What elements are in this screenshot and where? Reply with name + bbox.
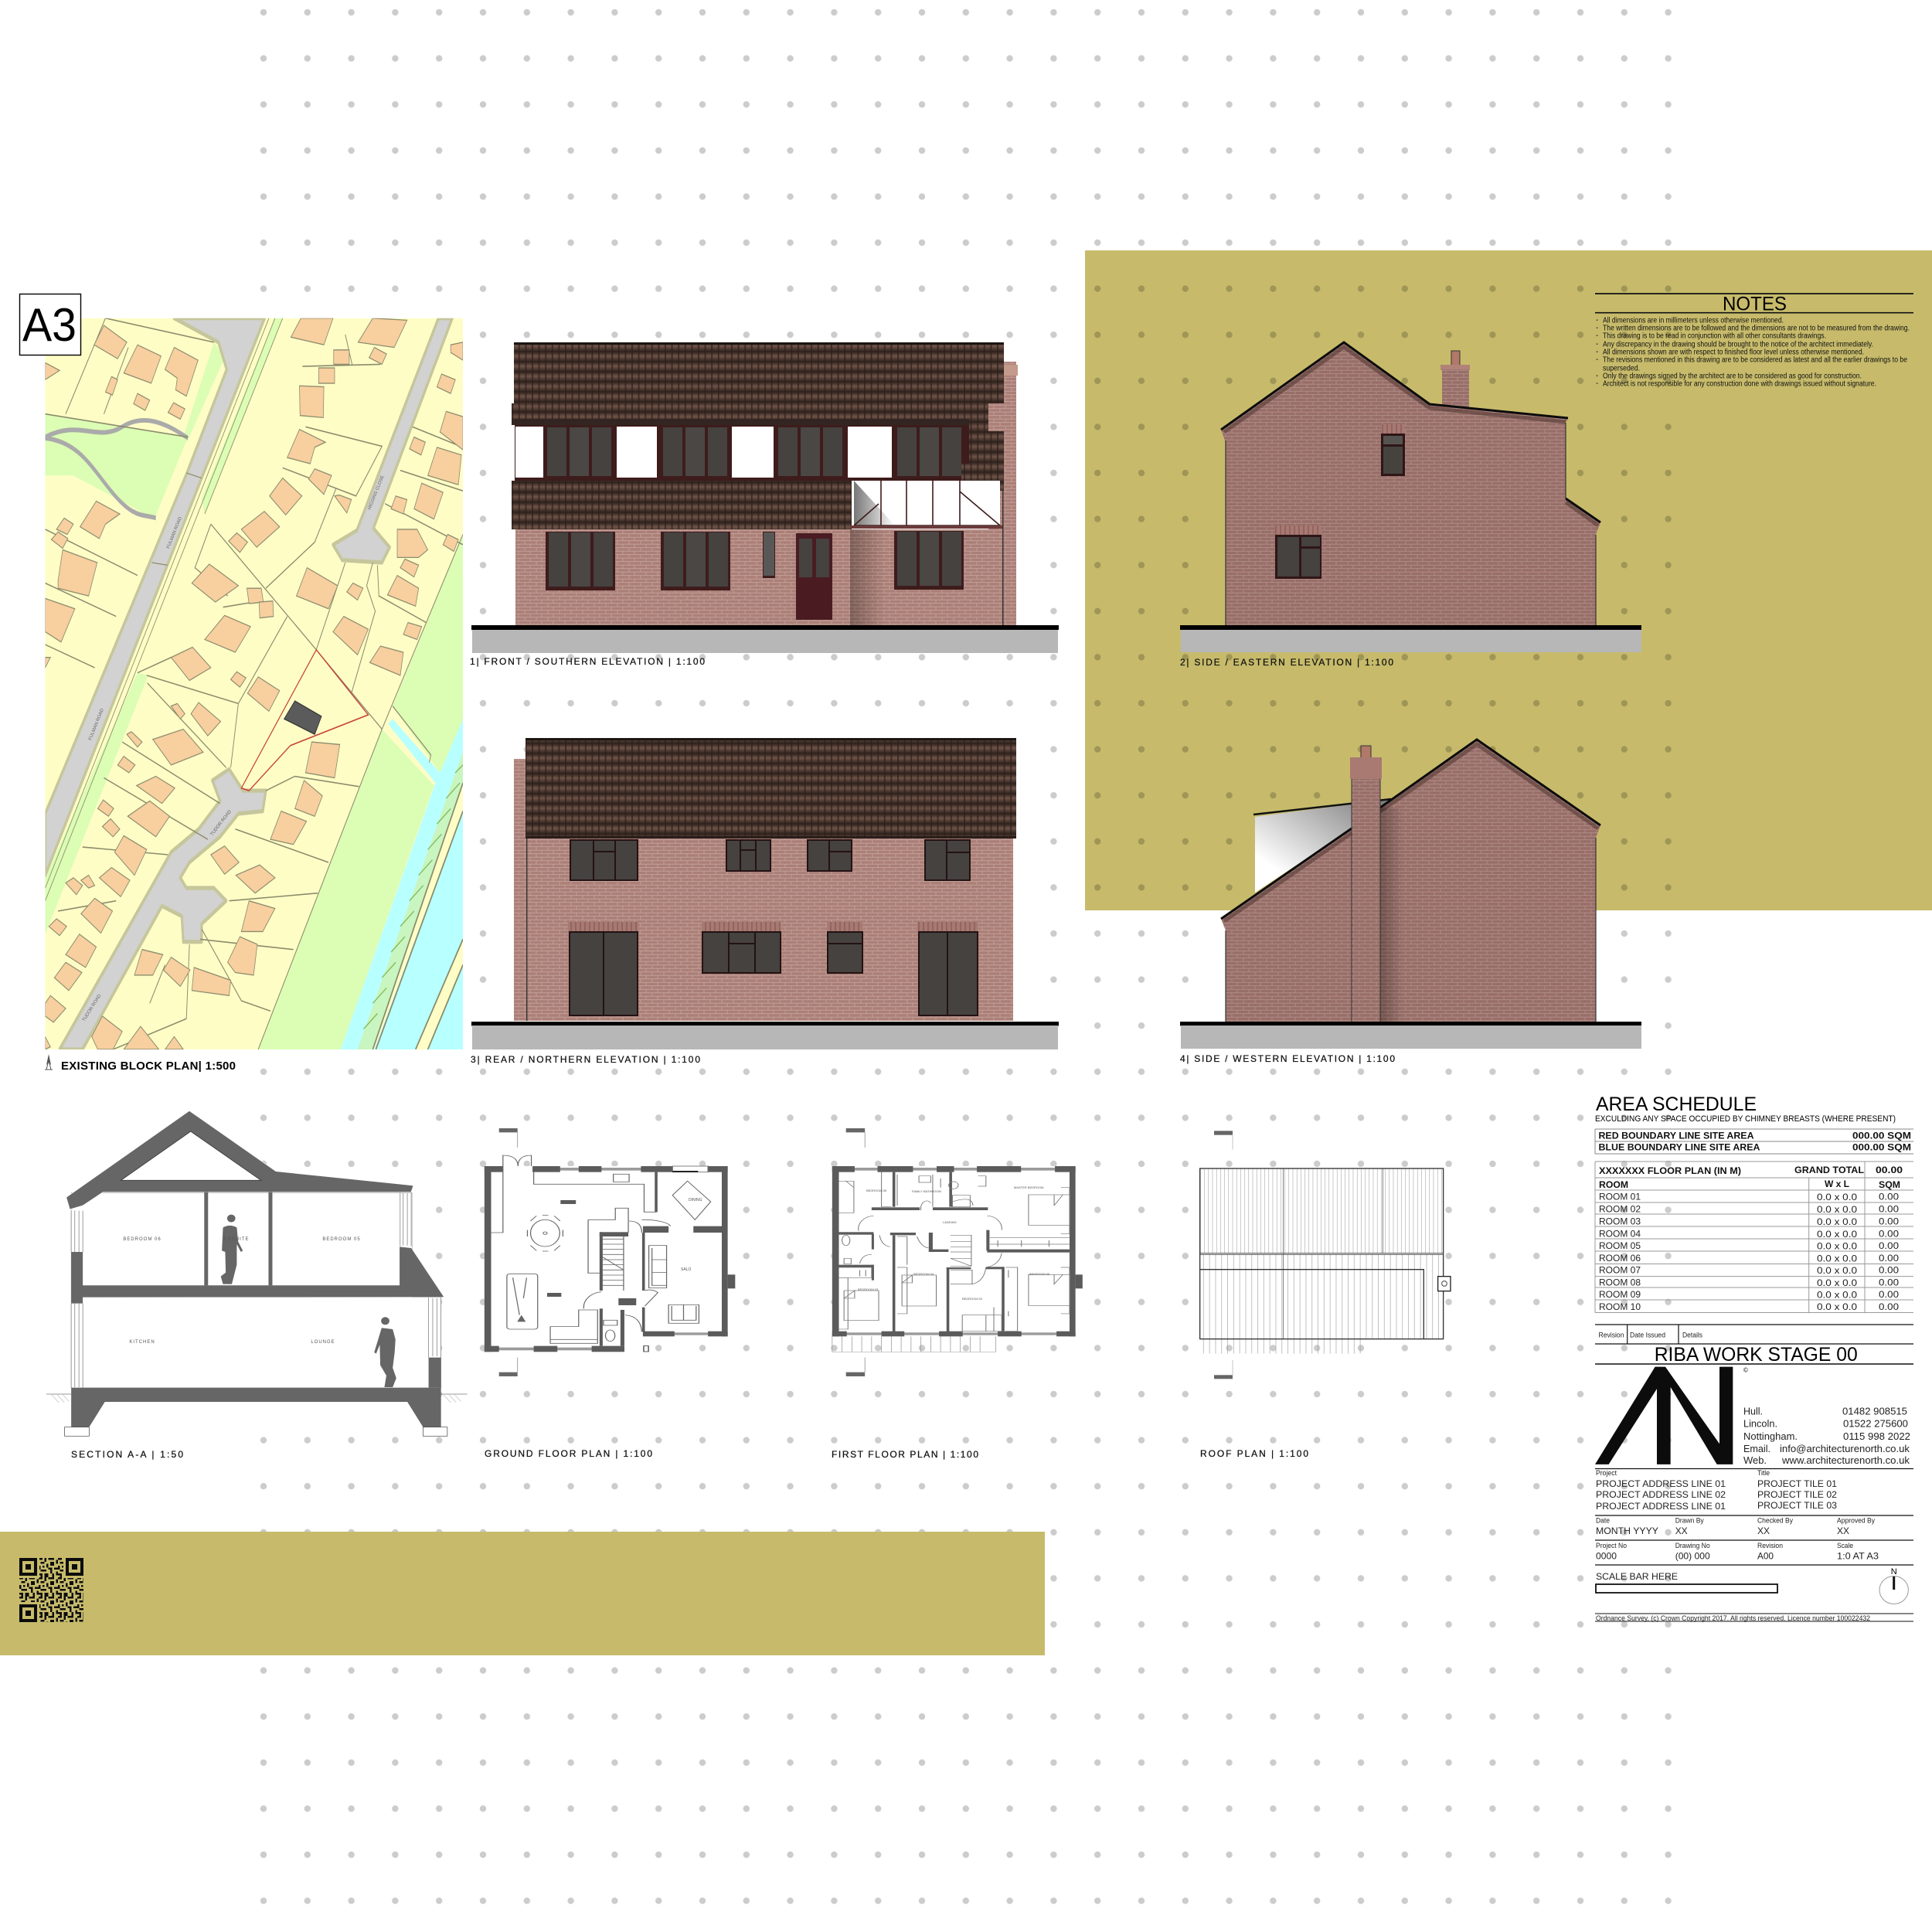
caption: ROOF PLAN | 1:100 [1200, 1448, 1308, 1459]
project fields: 0000 [1596, 1550, 1617, 1561]
first floor plan [832, 1128, 1083, 1460]
heading: AREA SCHEDULE [1596, 1094, 1757, 1115]
room schedule table: 0.00 [1879, 1277, 1899, 1287]
project fields: Scale [1837, 1542, 1853, 1549]
project fields: Drawing No [1675, 1542, 1710, 1549]
room schedule table: SQM [1879, 1179, 1900, 1190]
first floor room labels: BEDROOM 02 [962, 1297, 983, 1301]
windows [1275, 424, 1405, 579]
notes list: - [1596, 348, 1598, 356]
roads [46, 318, 452, 1049]
room schedule table: 0.0 x 0.0 [1817, 1265, 1857, 1276]
water channels [341, 719, 463, 1049]
dot grid background [242, 0, 1690, 1923]
section room labels: BEDROOM 05 [322, 1237, 361, 1242]
scale bar: SCALE BAR HERE [1596, 1571, 1678, 1582]
roof plan [1200, 1131, 1451, 1459]
section marks [1214, 1131, 1233, 1379]
caption: SECTION A-A | 1:50 [71, 1449, 183, 1460]
room schedule table: ROOM 02 [1599, 1204, 1641, 1215]
notes list: Any discrepancy in the drawing should be brought to the notice of the architect immediately. [1603, 340, 1873, 349]
contact details [1743, 1406, 1910, 1466]
main gable [1380, 740, 1600, 1022]
room schedule table: ROOM 06 [1599, 1253, 1641, 1264]
notes list: - [1596, 372, 1598, 380]
north arrow small [45, 1054, 53, 1070]
notes list: All dimensions are in millimeters unless otherwise mentioned. [1603, 316, 1784, 325]
logo [1595, 1367, 1733, 1464]
site house footprint [284, 701, 321, 734]
north point: N [1891, 1567, 1897, 1577]
first floor room labels: BEDROOM 03 [858, 1287, 879, 1291]
wall left [1221, 828, 1352, 1022]
window bars [832, 1168, 1076, 1335]
caption: 4| SIDE / WESTERN ELEVATION | 1:100 [1180, 1053, 1395, 1064]
wall [515, 529, 1002, 625]
section marks [499, 1128, 518, 1376]
revision row [1595, 1325, 1913, 1344]
road names on map: TUDOR ROAD [209, 809, 233, 837]
room schedule table: 0.0 x 0.0 [1817, 1301, 1857, 1312]
project fields: Drawn By [1675, 1517, 1704, 1525]
project fields: (00) 000 [1675, 1550, 1710, 1561]
room schedule table: XXXXXXX FLOOR PLAN (IN M) [1599, 1165, 1741, 1176]
project fields: XX [1757, 1526, 1770, 1536]
ground line [471, 1022, 1059, 1049]
project fields: PROJECT TILE 01 [1757, 1478, 1837, 1489]
project fields: PROJECT TILE 02 [1757, 1489, 1837, 1500]
notes list: All dimensions shown are with respect to finished floor level unless otherwise mentioned. [1603, 348, 1864, 356]
lower roof [512, 481, 852, 529]
first floor room labels: FAMILY BATHROOM [912, 1189, 941, 1193]
ground line [471, 625, 1059, 653]
A3 tag: A3 [22, 299, 77, 351]
room schedule table: 0.0 x 0.0 [1817, 1204, 1857, 1215]
site area table: 000.00 SQM [1852, 1130, 1911, 1141]
ground line [1180, 625, 1641, 652]
notes list: - [1596, 332, 1598, 340]
notes list: - [1596, 355, 1598, 364]
notes list: This drawing is to be read in conjunction with all other consultants drawings. [1603, 332, 1826, 340]
room schedule table: 0.00 [1879, 1216, 1899, 1227]
room schedule table: ROOM 01 [1599, 1191, 1641, 1202]
block plan map [46, 318, 463, 1049]
ground floor room labels: SALO [681, 1267, 691, 1272]
room schedule table: W x L [1825, 1179, 1849, 1189]
ground line [1180, 1022, 1641, 1049]
room schedule table: ROOM 08 [1599, 1277, 1641, 1287]
contact details: 01482 908515 [1842, 1406, 1907, 1417]
first floor room labels [858, 1185, 1050, 1301]
project fields: Approved By [1837, 1517, 1875, 1525]
contact details: Lincoln. [1743, 1418, 1777, 1430]
walls [832, 1166, 1083, 1336]
ground floor windows and door [546, 531, 964, 620]
fittings [492, 1155, 711, 1352]
contact details: info@architecturenorth.co.uk [1780, 1443, 1910, 1454]
project fields: XX [1837, 1526, 1849, 1536]
room schedule table: ROOM 10 [1599, 1301, 1641, 1312]
ordnance survey licence: Ordnance Survey, (c) Crown Copyright 2017. All rights reserved. Licence number 100022432 [1596, 1614, 1870, 1622]
road names on map: FULMAN ROAD [166, 516, 183, 549]
room schedule table: 0.0 x 0.0 [1817, 1289, 1857, 1300]
project fields: PROJECT ADDRESS LINE 02 [1596, 1489, 1726, 1500]
lower doors and windows [570, 932, 978, 1015]
project fields: MONTH YYYY [1596, 1526, 1658, 1536]
notes list: - [1596, 340, 1598, 349]
first floor room labels: MASTER BEDROOM [1014, 1185, 1043, 1189]
elevation 2: side / eastern [1180, 342, 1641, 668]
porch white panels [850, 481, 1002, 529]
work stage heading: RIBA WORK STAGE 00 [1655, 1344, 1858, 1366]
notes list: Architect is not responsible for any construction done with drawings issued without signature. [1603, 379, 1876, 388]
area schedule: EXCULDING ANY SPACE OCCUPIED BY CHIMNEY BREASTS (WHERE PRESENT) [1595, 1114, 1896, 1124]
chimney and wall [514, 759, 1013, 1021]
room schedule table: 0.00 [1879, 1240, 1899, 1251]
revision row: Revision [1598, 1332, 1624, 1339]
notes list [1596, 316, 1910, 388]
block plan caption: EXISTING BLOCK PLAN| 1:500 [61, 1060, 236, 1073]
first floor room labels: BEDROOM 06 [866, 1189, 887, 1192]
caption: 1| FRONT / SOUTHERN ELEVATION | 1:100 [470, 656, 705, 667]
road names on map [82, 475, 386, 1022]
icon: QR code [19, 1558, 83, 1622]
project fields: XX [1675, 1526, 1688, 1536]
revision row: Date Issued [1630, 1332, 1665, 1339]
room schedule table: 0.00 [1879, 1289, 1899, 1300]
notes block [1595, 294, 1913, 388]
room schedule table: 0.0 x 0.0 [1817, 1241, 1857, 1252]
chimney [1350, 746, 1382, 1022]
revision row: Details [1682, 1332, 1702, 1339]
ground floor room labels: DINING [689, 1198, 702, 1202]
elevation 4: side / western [1180, 740, 1641, 1064]
first floor white panels and windows [515, 425, 1004, 491]
notes list: - [1596, 379, 1598, 388]
room schedule table: 0.0 x 0.0 [1817, 1277, 1857, 1288]
room schedule table: ROOM 07 [1599, 1264, 1641, 1275]
ground floor plan [485, 1128, 735, 1459]
contact details: Nottingham. [1743, 1430, 1798, 1442]
title block [1595, 1325, 1913, 1622]
roof tiles [512, 342, 1004, 491]
contact details: 0115 998 2022 [1843, 1430, 1910, 1442]
caption: 2| SIDE / EASTERN ELEVATION | 1:100 [1180, 657, 1393, 668]
person silhouette: ensuite [221, 1215, 243, 1284]
project fields: PROJECT TILE 03 [1757, 1500, 1837, 1511]
contact details: www.architecturenorth.co.uk [1781, 1454, 1910, 1466]
site area table: BLUE BOUNDARY LINE SITE AREA [1598, 1142, 1760, 1153]
project fields: Revision [1757, 1542, 1783, 1549]
chimney [1438, 1277, 1451, 1291]
section room labels: KITCHEN [129, 1340, 155, 1345]
site area table: RED BOUNDARY LINE SITE AREA [1598, 1130, 1754, 1141]
chimney [1440, 351, 1470, 408]
section room labels: ENSUITE [223, 1237, 250, 1242]
project fields: Project No [1596, 1542, 1627, 1549]
project fields: PROJECT ADDRESS LINE 01 [1596, 1501, 1726, 1512]
site area table [1595, 1129, 1913, 1154]
room schedule table [1595, 1162, 1913, 1312]
site area table: 000.00 SQM [1852, 1142, 1911, 1153]
walls [485, 1166, 735, 1352]
section room labels [123, 1237, 361, 1345]
caption: GROUND FLOOR PLAN | 1:100 [485, 1448, 652, 1459]
chimney [987, 362, 1018, 624]
room schedule table: ROOM 04 [1599, 1229, 1641, 1240]
project fields: Checked By [1757, 1517, 1793, 1525]
room schedule table: ROOM [1599, 1179, 1628, 1190]
ground floor room labels [681, 1198, 702, 1272]
notes list: superseded. [1603, 364, 1640, 372]
scale bar [1596, 1571, 1777, 1593]
panel: top right yellow background [1085, 250, 1932, 910]
ground floor room tags [547, 1200, 636, 1305]
panel: bottom yellow band [0, 1532, 1045, 1655]
project fields: PROJECT ADDRESS LINE 01 [1596, 1478, 1726, 1489]
section A-A [46, 1111, 468, 1460]
project fields [1595, 1468, 1913, 1565]
roof [526, 738, 1016, 838]
property boundaries [46, 318, 463, 1049]
section room labels: BEDROOM 06 [123, 1237, 162, 1242]
panel: A3 sheet-size tag and existing block plan [20, 294, 463, 1073]
room schedule table: 0.00 [1879, 1204, 1899, 1215]
upper windows [570, 840, 970, 880]
room schedule table: GRAND TOTAL [1794, 1165, 1864, 1175]
road names on map: HIGGINS CLOSE [367, 475, 386, 511]
lintels [568, 922, 978, 931]
elevation 1: front / southern [470, 342, 1059, 667]
houses [46, 318, 463, 1049]
first floor room labels: BEDROOM 05 [1029, 1272, 1050, 1276]
room schedule table: ROOM 03 [1599, 1216, 1641, 1227]
room schedule table: 0.00 [1879, 1253, 1899, 1264]
red site boundary [241, 650, 368, 791]
project fields: 1:0 AT A3 [1837, 1550, 1879, 1561]
room schedule table: ROOM 05 [1599, 1240, 1641, 1251]
north point [1879, 1567, 1908, 1604]
room schedule table: 0.00 [1879, 1191, 1899, 1202]
project fields: Date [1596, 1517, 1610, 1525]
room schedule table: 0.0 x 0.0 [1817, 1253, 1857, 1264]
contact details: 01522 275600 [1843, 1418, 1908, 1430]
project fields: A00 [1757, 1550, 1774, 1561]
white gradient dormer [1255, 799, 1391, 893]
wall and roof outline [1221, 342, 1600, 625]
road names on map: TUDOR ROAD [82, 993, 103, 1022]
window bars [485, 1168, 728, 1350]
section drawing [46, 1111, 468, 1436]
road names on map: FULMAN ROAD [88, 708, 105, 741]
first floor room labels: LANDING [943, 1220, 957, 1224]
room schedule table: 00.00 [1876, 1165, 1903, 1175]
elevation 3: rear / northern [471, 738, 1059, 1065]
green spaces [46, 318, 463, 1049]
room schedule table: 0.0 x 0.0 [1817, 1216, 1857, 1227]
notes list: Only the drawings signed by the architect are to be considered as good for construction. [1603, 372, 1862, 380]
notes list: - [1596, 316, 1598, 325]
contact details: Web. [1743, 1454, 1767, 1466]
furniture [839, 1172, 1070, 1332]
project fields: Title [1757, 1469, 1770, 1477]
notes list: - [1596, 324, 1598, 332]
contact details: Hull. [1743, 1406, 1763, 1417]
room schedule table: 0.00 [1879, 1301, 1899, 1312]
section room labels: LOUNGE [311, 1340, 335, 1345]
notes block: NOTES [1723, 294, 1787, 315]
person silhouette: lounge [374, 1317, 396, 1387]
room schedule table: 0.0 x 0.0 [1817, 1192, 1857, 1202]
project fields: Project [1596, 1469, 1617, 1477]
section marks [846, 1128, 865, 1376]
room schedule table: 0.00 [1879, 1264, 1899, 1275]
caption: 3| REAR / NORTHERN ELEVATION | 1:100 [471, 1054, 700, 1065]
room schedule table: 0.0 x 0.0 [1817, 1229, 1857, 1240]
contact details: Email. [1743, 1443, 1770, 1454]
area schedule [1595, 1094, 1913, 1312]
room schedule table: 0.00 [1879, 1229, 1899, 1240]
eaves hatching [832, 1336, 996, 1352]
title block: © [1743, 1367, 1748, 1374]
room schedule table: ROOM 09 [1599, 1289, 1641, 1300]
caption: FIRST FLOOR PLAN | 1:100 [832, 1449, 978, 1460]
first floor room labels: BEDROOM 04 [913, 1272, 934, 1276]
